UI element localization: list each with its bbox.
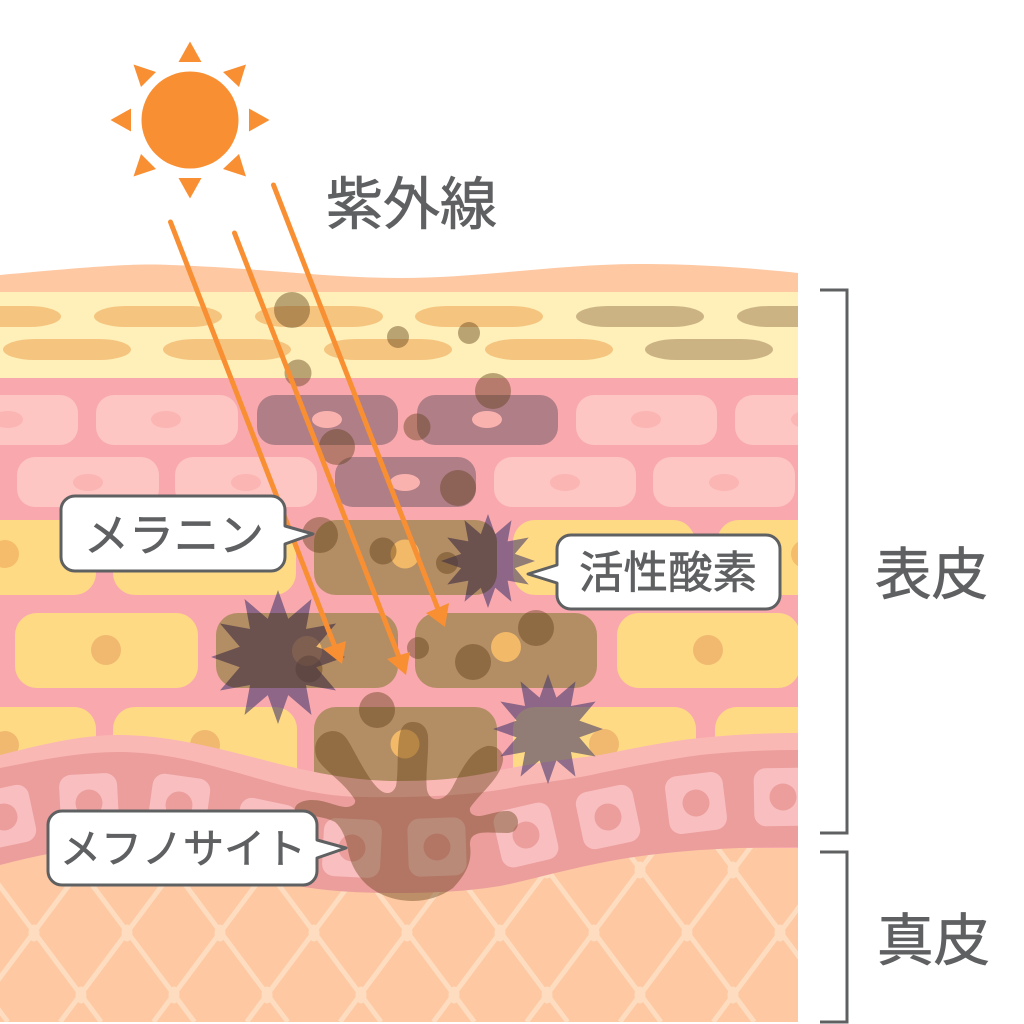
melanocyte [295,722,518,901]
bracket: epidermis [820,290,847,833]
layer: spinous cells row 3 [0,520,798,595]
skin cross-section [0,264,798,1022]
callout: melanin [61,496,313,571]
layer: granular cells row 2 [17,457,795,507]
label: epidermis: 表皮 [875,543,988,606]
callout: melanin: メラニン [84,510,264,561]
arrow: ultraviolet ray 2 [234,233,410,675]
layer: spinous cells row 4 [15,613,800,688]
layer: dermis with lattice [0,848,798,1022]
layer: basal membrane light band [0,733,798,800]
basal cells [0,767,813,878]
icon: sun [110,42,270,198]
callout: reactive oxygen: 活性酸素 [579,549,757,598]
layer: basal band [0,750,798,893]
arrow: ultraviolet ray 3 [274,185,449,627]
callout: melanocyte [48,811,346,885]
callout: reactive oxygen [528,535,780,609]
reactive oxygen burst: bottom [493,674,603,784]
layer: skin surface [0,264,798,293]
reactive oxygen burst: top [441,514,535,608]
arrow: ultraviolet ray 1 [170,222,346,664]
layer: pink epidermis background [0,378,798,848]
melanin granules [274,292,554,728]
bracket: dermis [820,852,847,1022]
label: dermis: 真皮 [877,909,990,972]
layer: stratum corneum [0,292,865,378]
callout: melanocyte: メフノサイト [60,826,306,872]
layer: granular cells row 1 [0,395,877,445]
layer: spinous cells row 5 [0,707,798,781]
reactive oxygen burst: left [211,590,345,724]
heading: ultraviolet: 紫外線 [326,173,497,237]
